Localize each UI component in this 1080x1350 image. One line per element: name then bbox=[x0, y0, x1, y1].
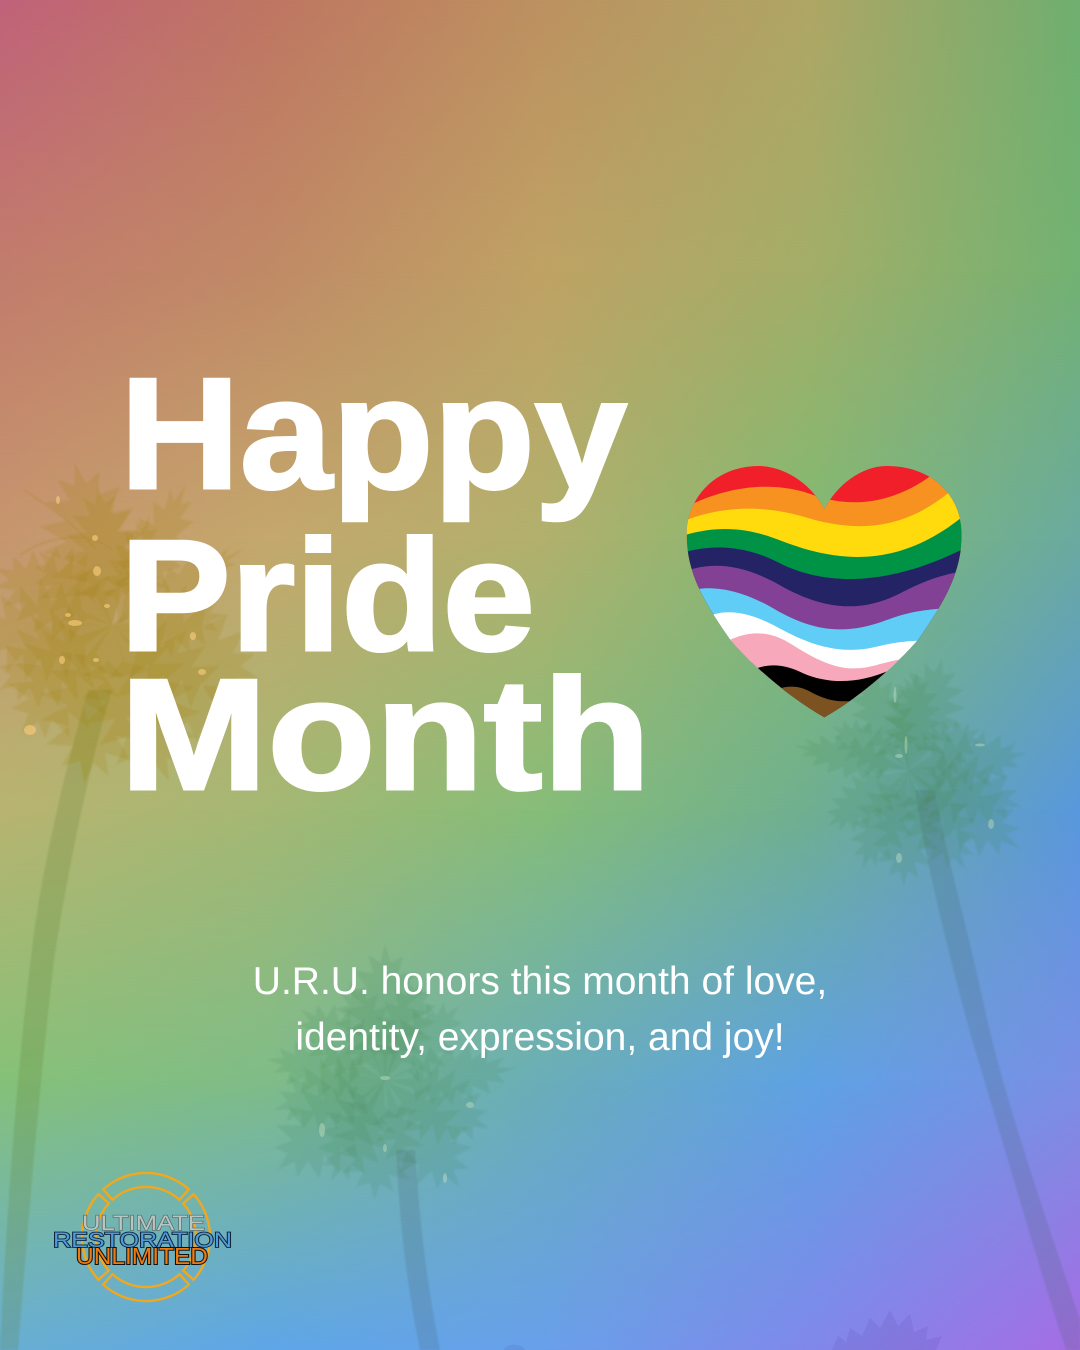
logo wordmark: UNLIMITED bbox=[76, 1243, 208, 1269]
palm highlights: center bbox=[319, 1076, 474, 1183]
text block: tagline bbox=[253, 960, 827, 1059]
palm tree: bottom right tip bbox=[504, 1310, 942, 1350]
palm tree: right bbox=[790, 647, 1080, 1350]
palm highlights: left bbox=[24, 496, 206, 735]
title: Happy Pride Month: Happy bbox=[120, 346, 627, 522]
title: Happy Pride Month bbox=[120, 346, 651, 823]
logo wordmark bbox=[53, 1212, 232, 1269]
logo wordmark: RESTORATION bbox=[53, 1229, 232, 1252]
palm tree: left bbox=[0, 451, 277, 1350]
text block: tagline: identity, expression, and joy! bbox=[295, 1016, 785, 1059]
logo wordmark: ULTIMATE bbox=[82, 1212, 205, 1235]
title: Happy Pride Month: Pride bbox=[120, 508, 535, 684]
palm highlights: right bbox=[894, 687, 994, 863]
logo ring bbox=[82, 1173, 210, 1301]
palm tree: center bbox=[248, 945, 517, 1350]
text block: tagline: U.R.U. honors this month of love, bbox=[253, 960, 827, 1003]
title: Happy Pride Month: Month bbox=[120, 647, 651, 823]
icon: rainbow progress pride heart bbox=[686, 466, 962, 718]
